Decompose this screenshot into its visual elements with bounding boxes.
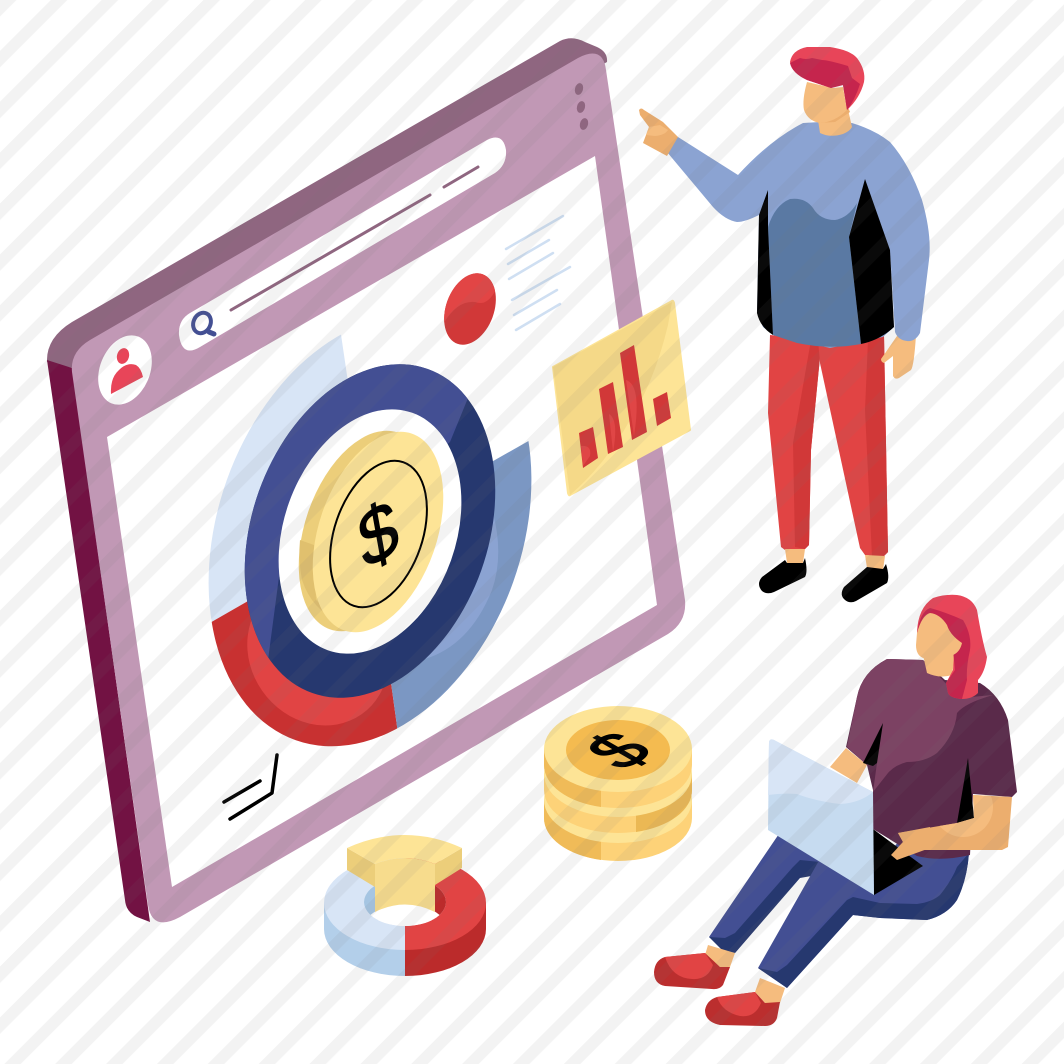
man shoes (759, 549, 888, 602)
man trousers (768, 335, 888, 557)
woman jeans (709, 825, 969, 988)
icon: coin with dollar sign (274, 413, 468, 650)
woman feet (654, 945, 785, 1026)
man hand lower (881, 335, 916, 379)
icon: red dot (444, 273, 496, 345)
man pointing hand (639, 108, 678, 156)
panel: bar chart card (553, 301, 690, 495)
text lines placeholder (506, 216, 570, 330)
panel: browser window (47, 38, 685, 922)
icon: coin with dollar sign: $ (352, 482, 404, 587)
laptop (768, 739, 930, 895)
woman right arm (898, 795, 1012, 856)
search bar (179, 138, 506, 351)
icon: coin stack (544, 706, 692, 861)
decorative text lines (224, 755, 277, 819)
man torso and sweater (667, 122, 930, 348)
icon: user avatar (88, 327, 162, 413)
figure: seated woman (654, 595, 1017, 1026)
chart: donut on screen (208, 334, 532, 746)
man head (790, 47, 864, 136)
chart: 3D donut (324, 835, 486, 976)
woman head and hair (916, 595, 987, 699)
figure: standing man (639, 47, 930, 602)
icon: coin stack: $ (570, 722, 668, 779)
woman shirt (846, 659, 1017, 859)
woman left arm (830, 748, 867, 783)
